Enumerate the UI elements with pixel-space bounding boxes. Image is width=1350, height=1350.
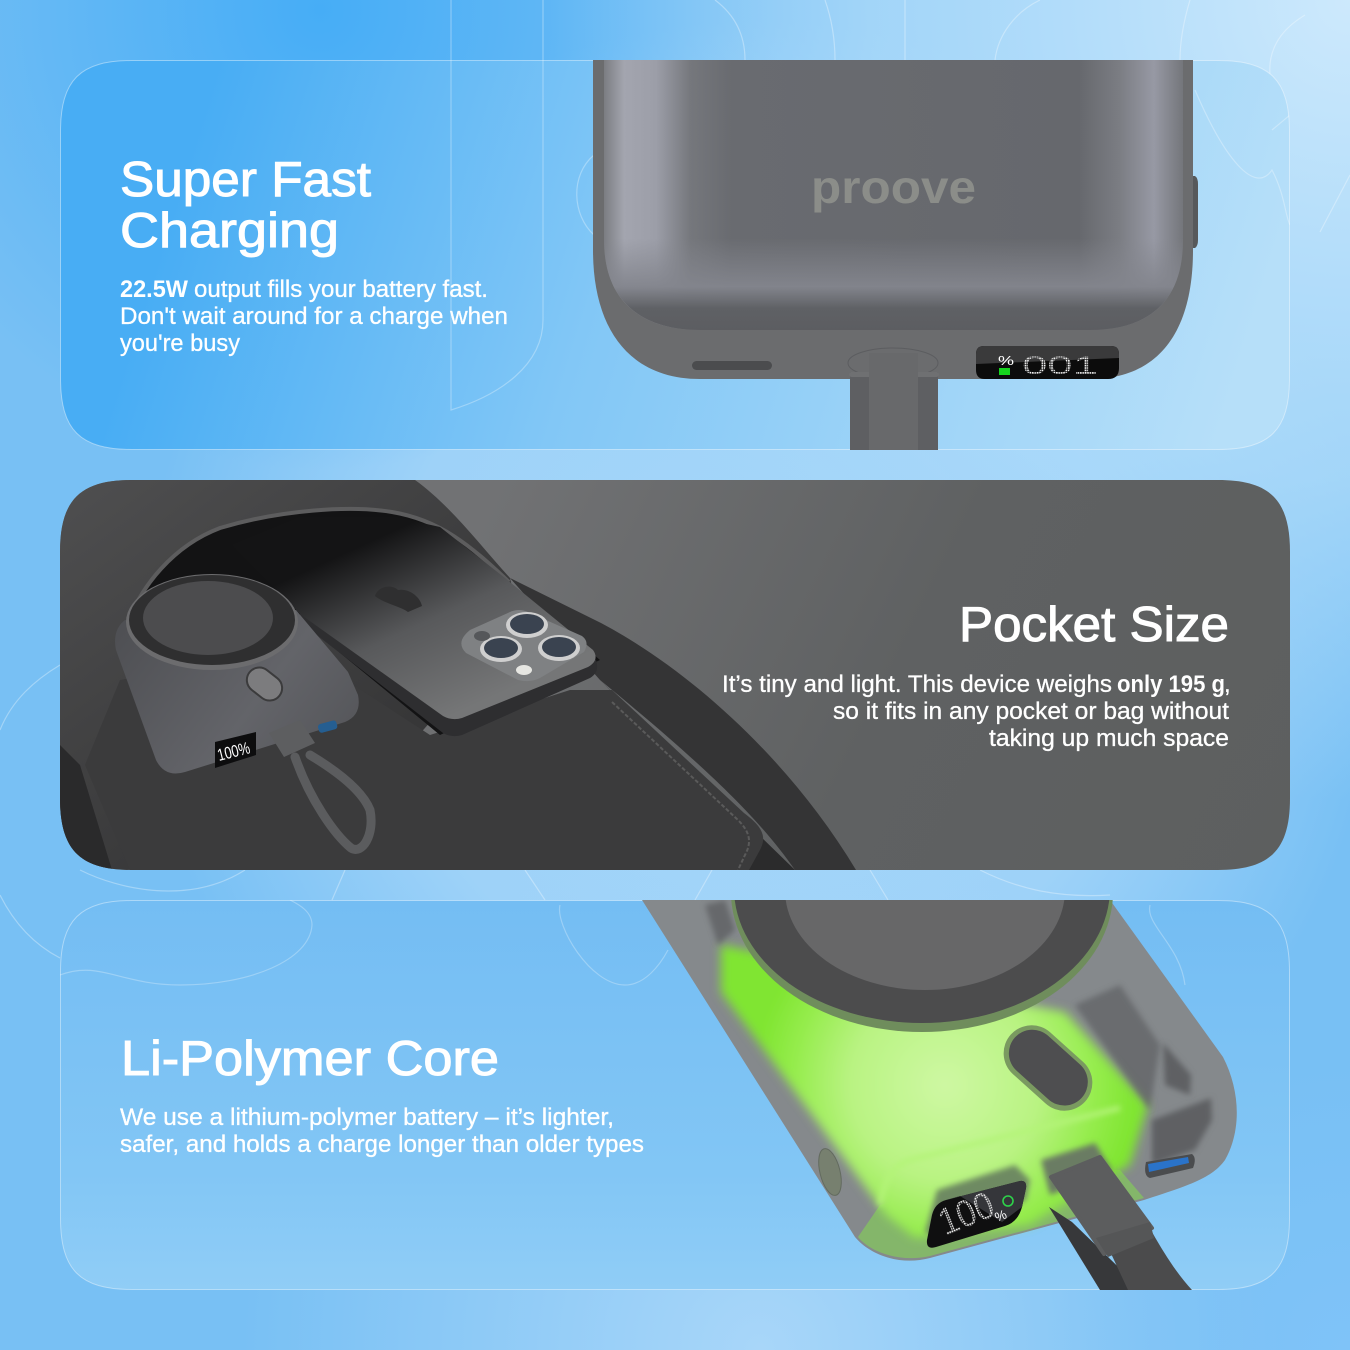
usb port bbox=[318, 720, 338, 733]
camera module bbox=[461, 610, 587, 681]
socket halo bbox=[1041, 1143, 1112, 1195]
bag lower pocket bbox=[114, 679, 764, 870]
logo: proove: proove bbox=[811, 161, 976, 213]
led display: 001 percent: 001 bbox=[1022, 352, 1098, 380]
text block: weight description bbox=[722, 671, 1231, 752]
text block: output description: you're busy bbox=[120, 330, 240, 357]
power bank: top-down product image bbox=[593, 60, 1198, 450]
bag strap bbox=[510, 578, 856, 870]
led display: 001 percent: % bbox=[998, 353, 1015, 368]
text block: battery description: safer, and holds a charge longer than older types bbox=[120, 1131, 644, 1158]
illustration: bag with phone and power bank bbox=[60, 480, 856, 870]
text block: output description: Don't wait around for a charge when bbox=[120, 303, 508, 330]
panel: li-polymer core bbox=[60, 900, 1290, 1290]
text block: weight description: , bbox=[1224, 671, 1231, 698]
apple logo mark bbox=[375, 587, 422, 612]
heading: super fast charging: Super Fast bbox=[120, 153, 371, 207]
text block: weight description: It’s tiny and light. This device weighs bbox=[722, 671, 1112, 698]
led display: 001 percent bbox=[976, 346, 1119, 380]
text block: output description: 22.5W bbox=[120, 276, 188, 303]
text block: weight description: so it fits in any pocket or bag without bbox=[833, 698, 1229, 725]
heading: super fast charging bbox=[120, 153, 371, 258]
shell green bottom edge bbox=[858, 1170, 1144, 1258]
power button bbox=[818, 1148, 842, 1196]
usb port bbox=[1145, 1154, 1195, 1178]
cable strap bbox=[848, 348, 939, 450]
led display: 100 percent: 100 bbox=[933, 1184, 1000, 1244]
slider button bbox=[1004, 1025, 1092, 1111]
usb-c port bbox=[692, 361, 772, 370]
panel: pocket size bbox=[60, 480, 1290, 870]
translucent shell bbox=[642, 900, 1237, 1261]
slider bbox=[246, 666, 284, 702]
bag interior bbox=[125, 509, 600, 735]
wireless charging disk bbox=[731, 900, 1113, 1032]
wireless charging disk bbox=[126, 574, 298, 670]
smartphone bbox=[282, 524, 596, 736]
display 100%: 100% bbox=[215, 738, 252, 765]
cable loop bbox=[269, 720, 371, 849]
green core bbox=[721, 945, 1148, 1238]
bag flap bbox=[60, 480, 520, 870]
heading: super fast charging: Charging bbox=[120, 204, 339, 258]
text block: battery description bbox=[120, 1104, 644, 1158]
text block: output description bbox=[120, 276, 508, 357]
text block: weight description: only 195 g bbox=[1117, 671, 1225, 698]
power bank: translucent with green core bbox=[642, 900, 1237, 1290]
left strap and buckle bbox=[60, 745, 112, 870]
text block: weight description: taking up much space bbox=[989, 725, 1229, 752]
heading: li-polymer core: Li-Polymer Core bbox=[121, 1032, 499, 1086]
heading: pocket size: Pocket Size bbox=[959, 598, 1229, 652]
led display: 100 percent bbox=[925, 1165, 1030, 1248]
internal components bbox=[705, 900, 1212, 1165]
led display: 100 percent: % bbox=[993, 1206, 1009, 1225]
cable bbox=[1041, 1143, 1192, 1290]
panel: super fast charging bbox=[60, 60, 1296, 450]
text block: output description: output fills your battery fast. bbox=[194, 276, 488, 303]
text block: battery description: We use a lithium-polymer battery – it’s lighter, bbox=[120, 1104, 614, 1131]
crease highlight bbox=[880, 1108, 1120, 1205]
power bank in bag bbox=[115, 574, 371, 849]
